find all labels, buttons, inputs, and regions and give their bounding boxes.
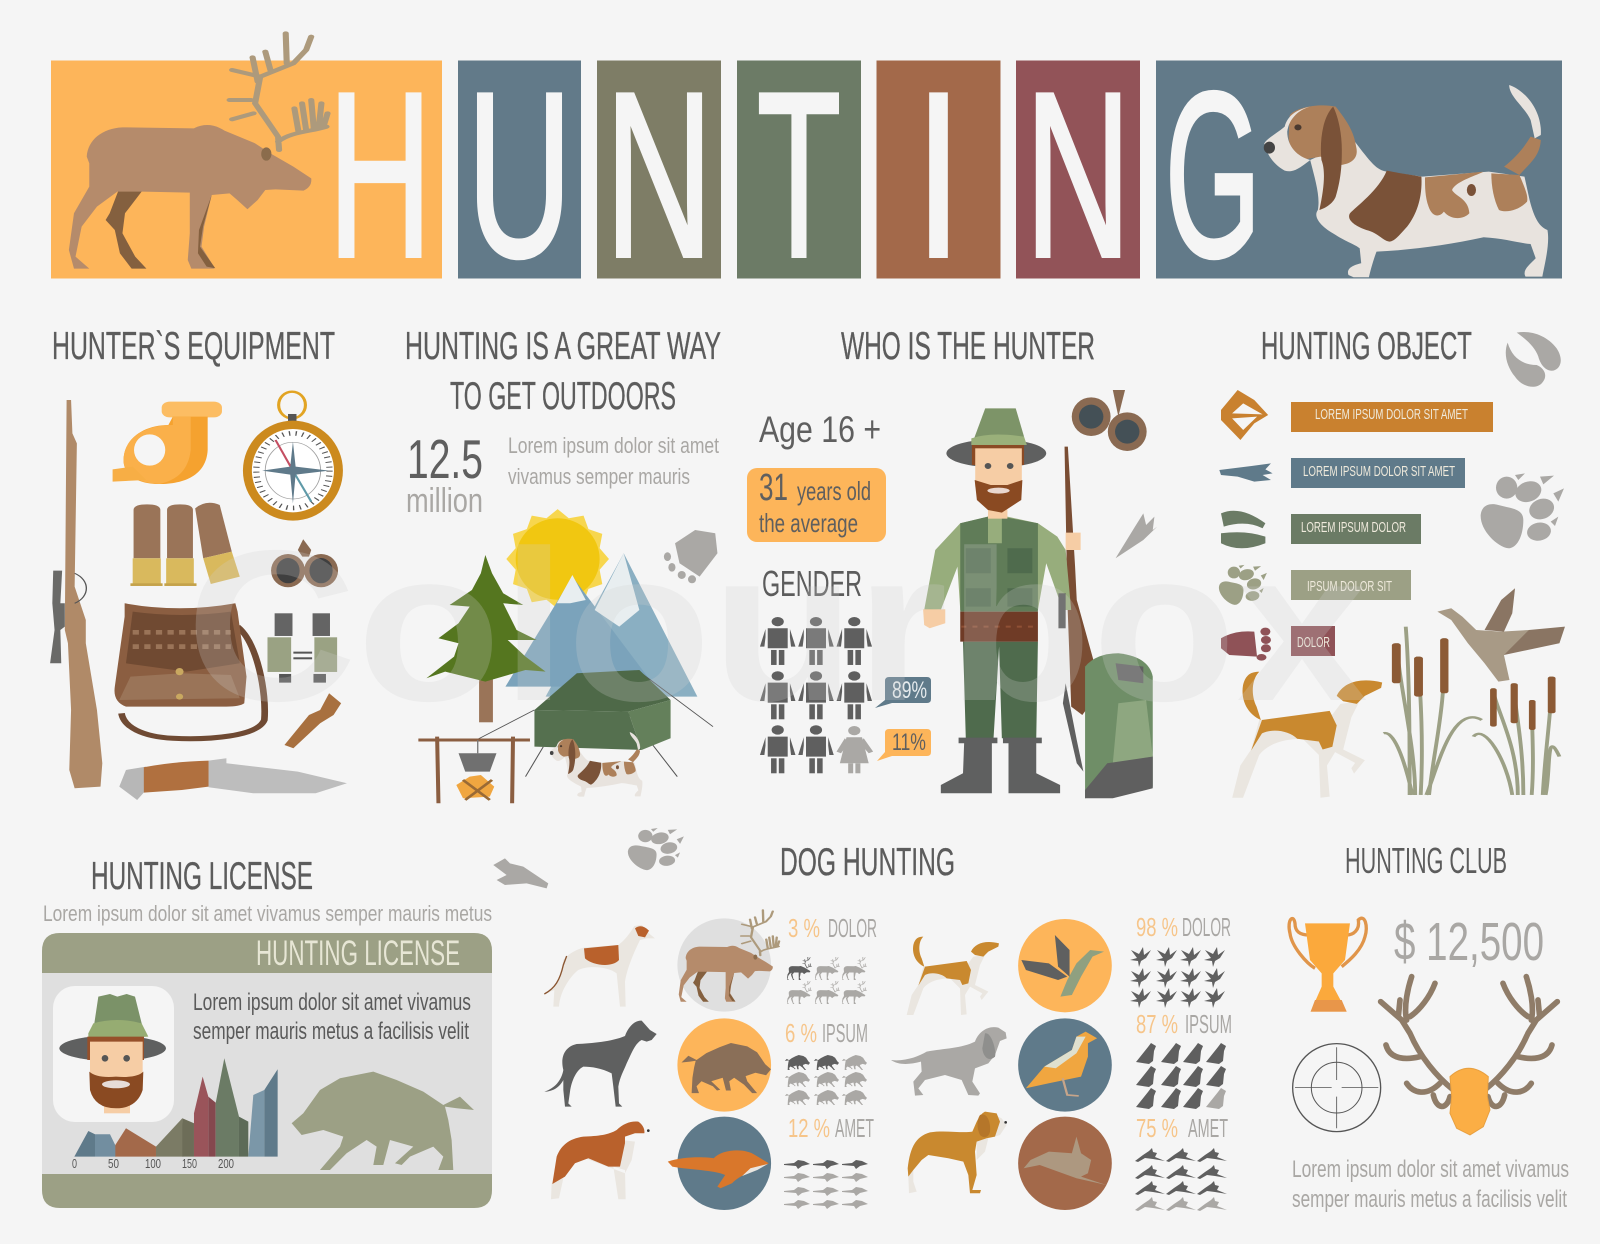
stat: 3 percent dolor: 3 %	[788, 913, 820, 943]
icon: borzoi	[551, 1121, 650, 1199]
letter T: T	[757, 43, 841, 306]
heading: who is the hunter: WHO IS THE HUNTER	[841, 325, 1095, 368]
icon: rifle	[1065, 447, 1093, 715]
letter N: N	[1025, 43, 1131, 306]
banner: green: LOREM IPSUM DOLOR	[1301, 519, 1406, 536]
panel: dog hunting breeds and prey	[544, 910, 1232, 1211]
stat: 98 percent dolor: 98 %	[1136, 912, 1178, 942]
icon: mountains	[505, 553, 697, 697]
banner: orange	[1291, 402, 1493, 432]
banner: sage	[1291, 570, 1411, 600]
stat: 98 percent dolor: DOLOR	[1182, 912, 1231, 942]
N tile	[597, 60, 721, 278]
illustration: outdoors camp scene	[418, 509, 717, 803]
text block: club blurb	[1292, 1156, 1569, 1213]
icon: sage paw track	[1219, 565, 1267, 605]
card portrait	[53, 986, 174, 1122]
icon: greyhound	[544, 925, 655, 1007]
icon: green hoof track	[1221, 511, 1265, 548]
icon: hunting horn	[113, 402, 222, 484]
card title: HUNTING LICENSE	[256, 934, 460, 973]
icon: bear track	[664, 530, 717, 583]
callout: average age	[747, 467, 886, 542]
icon: reeds left	[1384, 627, 1482, 795]
panel: equipment icons	[50, 392, 347, 800]
dogs: left column	[544, 925, 657, 1199]
pictogram: fox count	[784, 1160, 868, 1209]
prey circle: fox	[677, 1117, 771, 1210]
icon: duck in circle	[1021, 935, 1104, 997]
text block: outdoors blurb	[508, 433, 719, 489]
icon: small basset	[550, 732, 642, 797]
heading: hunting object: HUNTING OBJECT	[1261, 325, 1472, 368]
text block: outdoors blurb: vivamus semper mauris	[508, 464, 690, 489]
card text: Lorem ipsum dolor sit amet vivamus	[193, 989, 471, 1016]
stat: 75 percent amet: AMET	[1188, 1113, 1228, 1143]
icon: backpack	[1063, 653, 1153, 798]
panel: hunting object tracks and labels	[1219, 332, 1564, 661]
stat: 3 percent dolor: DOLOR	[828, 913, 877, 943]
icon: knife	[119, 758, 347, 800]
icon: maroon bear track	[1221, 628, 1271, 661]
pictogram: boar count	[785, 1055, 867, 1105]
chart axis labels: 150	[182, 1156, 197, 1171]
icon: eyecups	[1072, 390, 1147, 451]
heading: great way outdoors: TO GET OUTDOORS	[450, 375, 676, 418]
chart axis labels: 200	[218, 1156, 234, 1171]
stat: 6 percent ipsum	[785, 1018, 868, 1048]
stat: 12.5 million: 12.5	[407, 428, 483, 490]
icon: bird track	[493, 858, 548, 888]
icon: basset hound	[1264, 85, 1548, 277]
stat: 87 percent ipsum	[1136, 1009, 1232, 1039]
letter G: G	[1165, 43, 1261, 306]
letter H: H	[328, 43, 432, 306]
illustration: hunter	[923, 390, 1157, 798]
icon: wolfhound	[544, 1021, 657, 1107]
icon: trophy	[1289, 918, 1366, 1012]
icon: scope	[1058, 593, 1066, 628]
text block: license subtitle: Lorem ipsum dolor sit amet vivamus semper mauris metus	[43, 901, 492, 926]
chart axis labels: 0	[72, 1156, 77, 1171]
icon: game bag	[114, 603, 265, 739]
callout: average age: 31	[759, 467, 788, 509]
icon: pointer dog	[1232, 672, 1382, 798]
pictogram: duck count	[1130, 947, 1225, 1008]
banner: maroon: DOLOR	[1297, 634, 1330, 651]
card text	[193, 989, 471, 1045]
heading: hunter's equipment: HUNTER`S EQUIPMENT	[52, 325, 335, 368]
card footer	[42, 1174, 492, 1208]
stat: 6 percent ipsum: 6 %	[785, 1018, 817, 1048]
chart axis labels: 50	[108, 1156, 119, 1171]
letter U: U	[467, 43, 572, 306]
heading: gender: GENDER	[762, 563, 862, 604]
icon: boar silhouette	[292, 1072, 474, 1170]
card body	[42, 933, 492, 1208]
I tile	[876, 60, 1000, 278]
icon: hunter face	[59, 994, 166, 1113]
second N tile	[1016, 60, 1140, 278]
prey circle: partridge	[1018, 1018, 1112, 1112]
dogs: right column	[891, 937, 1007, 1193]
text block: outdoors blurb: Lorem ipsum dolor sit amet	[508, 433, 719, 458]
stat: age: Age 16 +	[759, 409, 881, 450]
icon: grey hoof track	[1506, 332, 1561, 387]
banner: blue	[1291, 458, 1465, 488]
callout: 11 percent: 11%	[892, 729, 926, 756]
H tile	[51, 60, 442, 278]
title banner: HUNTING	[51, 33, 1562, 306]
icon: blue bird track	[1219, 463, 1273, 482]
icon: boar in circle	[681, 1043, 771, 1093]
banner: orange: LOREM IPSUM DOLOR SIT AMET	[1315, 406, 1468, 423]
stat: 12 percent amet	[788, 1113, 874, 1143]
icon: crosshair	[1293, 1044, 1381, 1132]
prey circle: duck	[1018, 919, 1112, 1012]
icon: orange bird track	[1221, 390, 1268, 440]
icon: reindeer	[69, 33, 328, 269]
pictogram: hare count	[1135, 1148, 1227, 1211]
callout: 89 percent	[875, 677, 931, 708]
stat: 3 percent dolor	[788, 913, 877, 943]
callout: average age: years old	[797, 476, 871, 506]
icon: campfire with pot	[418, 737, 530, 803]
banner: sage: IPSUM DOLOR SIT	[1307, 578, 1392, 595]
illustration: pointer dog, reeds and duck	[1232, 588, 1565, 798]
icon: rifle	[50, 400, 102, 788]
icon: bird track	[1116, 513, 1157, 558]
chart: area peaks	[74, 1058, 278, 1157]
icon: reindeer in circle	[679, 910, 779, 1002]
pictogram: deer count	[787, 957, 867, 1004]
T tile	[737, 60, 861, 278]
callout: average age: the average	[759, 508, 858, 538]
heading: great way outdoors	[405, 325, 721, 418]
icon: tent	[476, 670, 713, 777]
banner: green	[1291, 514, 1421, 544]
stat: 75 percent amet: 75 %	[1136, 1113, 1178, 1143]
icon: flying duck	[1437, 588, 1565, 682]
heading: hunting license: HUNTING LICENSE	[91, 855, 313, 898]
icon: partridge	[1026, 1032, 1097, 1096]
stat: prize money: $ 12,500	[1394, 912, 1544, 972]
icon: grey paw track	[1481, 473, 1564, 548]
stat: 6 percent ipsum: IPSUM	[822, 1018, 868, 1048]
icon: spaniel	[908, 1112, 1007, 1193]
icon: sun	[506, 509, 609, 609]
stat: 98 percent dolor	[1136, 912, 1231, 942]
icon: hare	[1017, 1137, 1106, 1185]
stat: 12.5 million	[406, 428, 483, 520]
icon: wolf track	[628, 828, 684, 870]
icon: setter	[891, 1027, 1007, 1096]
pictogram: gender figures	[760, 617, 873, 773]
stat: 12 percent amet: 12 %	[788, 1113, 830, 1143]
prey circle: hare	[1018, 1117, 1112, 1210]
stat: 12 percent amet: AMET	[835, 1113, 874, 1143]
watermark: Colourbox	[186, 505, 1368, 746]
stat: 87 percent ipsum: IPSUM	[1185, 1009, 1232, 1039]
icon: antler trophy	[1381, 977, 1557, 1135]
icon: eyecups	[271, 539, 338, 587]
card text: semper mauris metus a facilisis velit	[193, 1018, 469, 1045]
icon: compass	[243, 392, 343, 521]
icon: fox	[668, 1150, 769, 1188]
letter I: I	[915, 43, 962, 306]
icon: pointer	[907, 937, 999, 1015]
chart axis labels	[72, 1156, 234, 1171]
prey circle: deer	[677, 918, 771, 1012]
stat: 12.5 million: million	[406, 482, 483, 520]
icon: binoculars	[267, 613, 337, 683]
pictogram: quail count	[1136, 1043, 1226, 1109]
panel: license card	[42, 933, 492, 1208]
tracks column	[1219, 390, 1273, 661]
banner: blue: LOREM IPSUM DOLOR SIT AMET	[1303, 463, 1455, 480]
heading: great way outdoors: HUNTING IS A GREAT WAY	[405, 325, 721, 368]
icon: pine tree	[426, 555, 546, 722]
prey circle: boar	[677, 1018, 771, 1112]
stat: 87 percent ipsum: 87 %	[1136, 1009, 1178, 1039]
G tile	[1156, 60, 1562, 278]
banner: maroon	[1291, 626, 1335, 656]
U tile	[458, 60, 581, 278]
letter N: N	[605, 43, 713, 306]
card header	[42, 933, 492, 973]
stat: 75 percent amet	[1136, 1113, 1228, 1143]
icon: reeds right	[1473, 677, 1559, 795]
chart axis labels: 100	[145, 1156, 161, 1171]
heading: dog hunting: DOG HUNTING	[780, 841, 955, 884]
callout: 11 percent	[877, 729, 931, 761]
icon: duck call	[284, 693, 341, 748]
callout: 89 percent: 89%	[892, 677, 927, 704]
panel: club icons	[1289, 918, 1557, 1135]
hunter figure	[923, 408, 1081, 793]
icon: shotgun shells	[130, 503, 240, 586]
